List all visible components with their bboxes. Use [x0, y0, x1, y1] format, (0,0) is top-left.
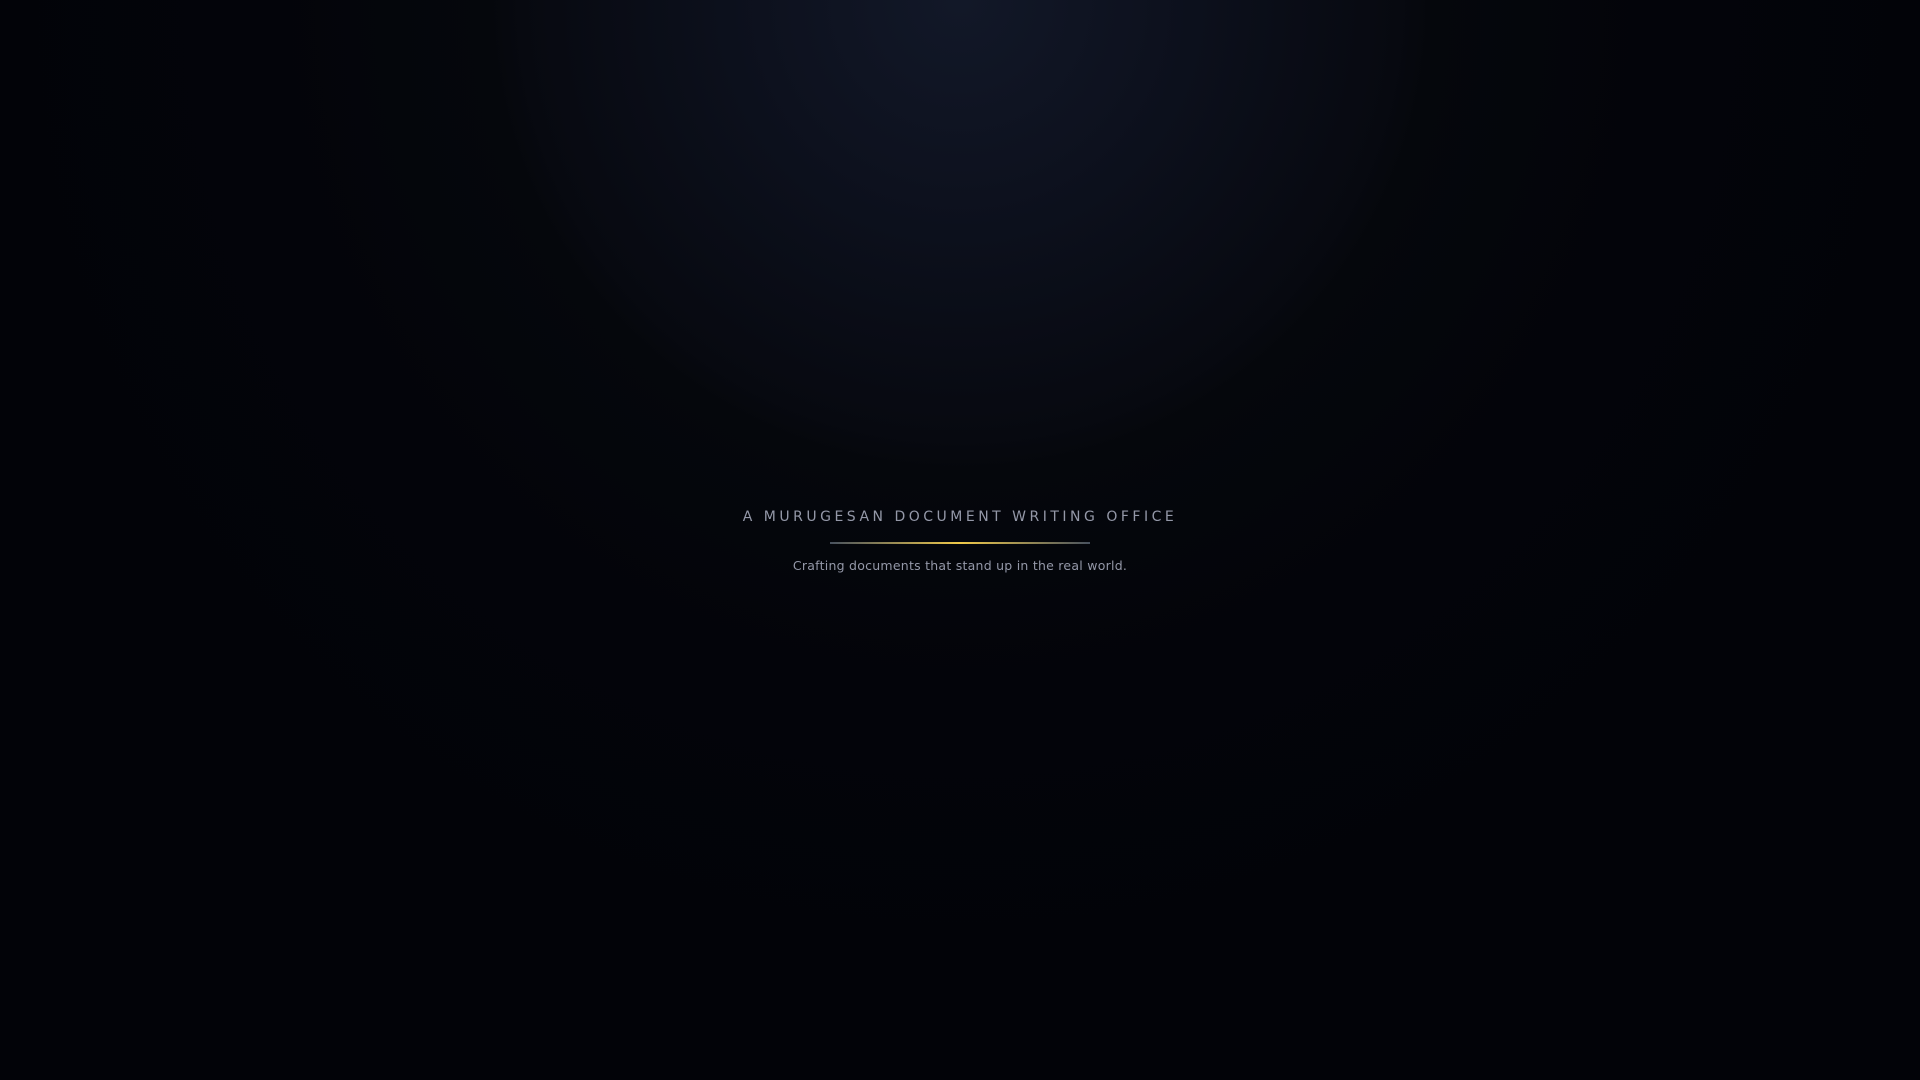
heading: A MURUGESAN DOCUMENT WRITING OFFICE [743, 509, 1177, 525]
gold divider [830, 542, 1090, 544]
closing text block [742, 509, 1177, 573]
tagline: Crafting documents that stand up in the real world. [793, 558, 1127, 573]
